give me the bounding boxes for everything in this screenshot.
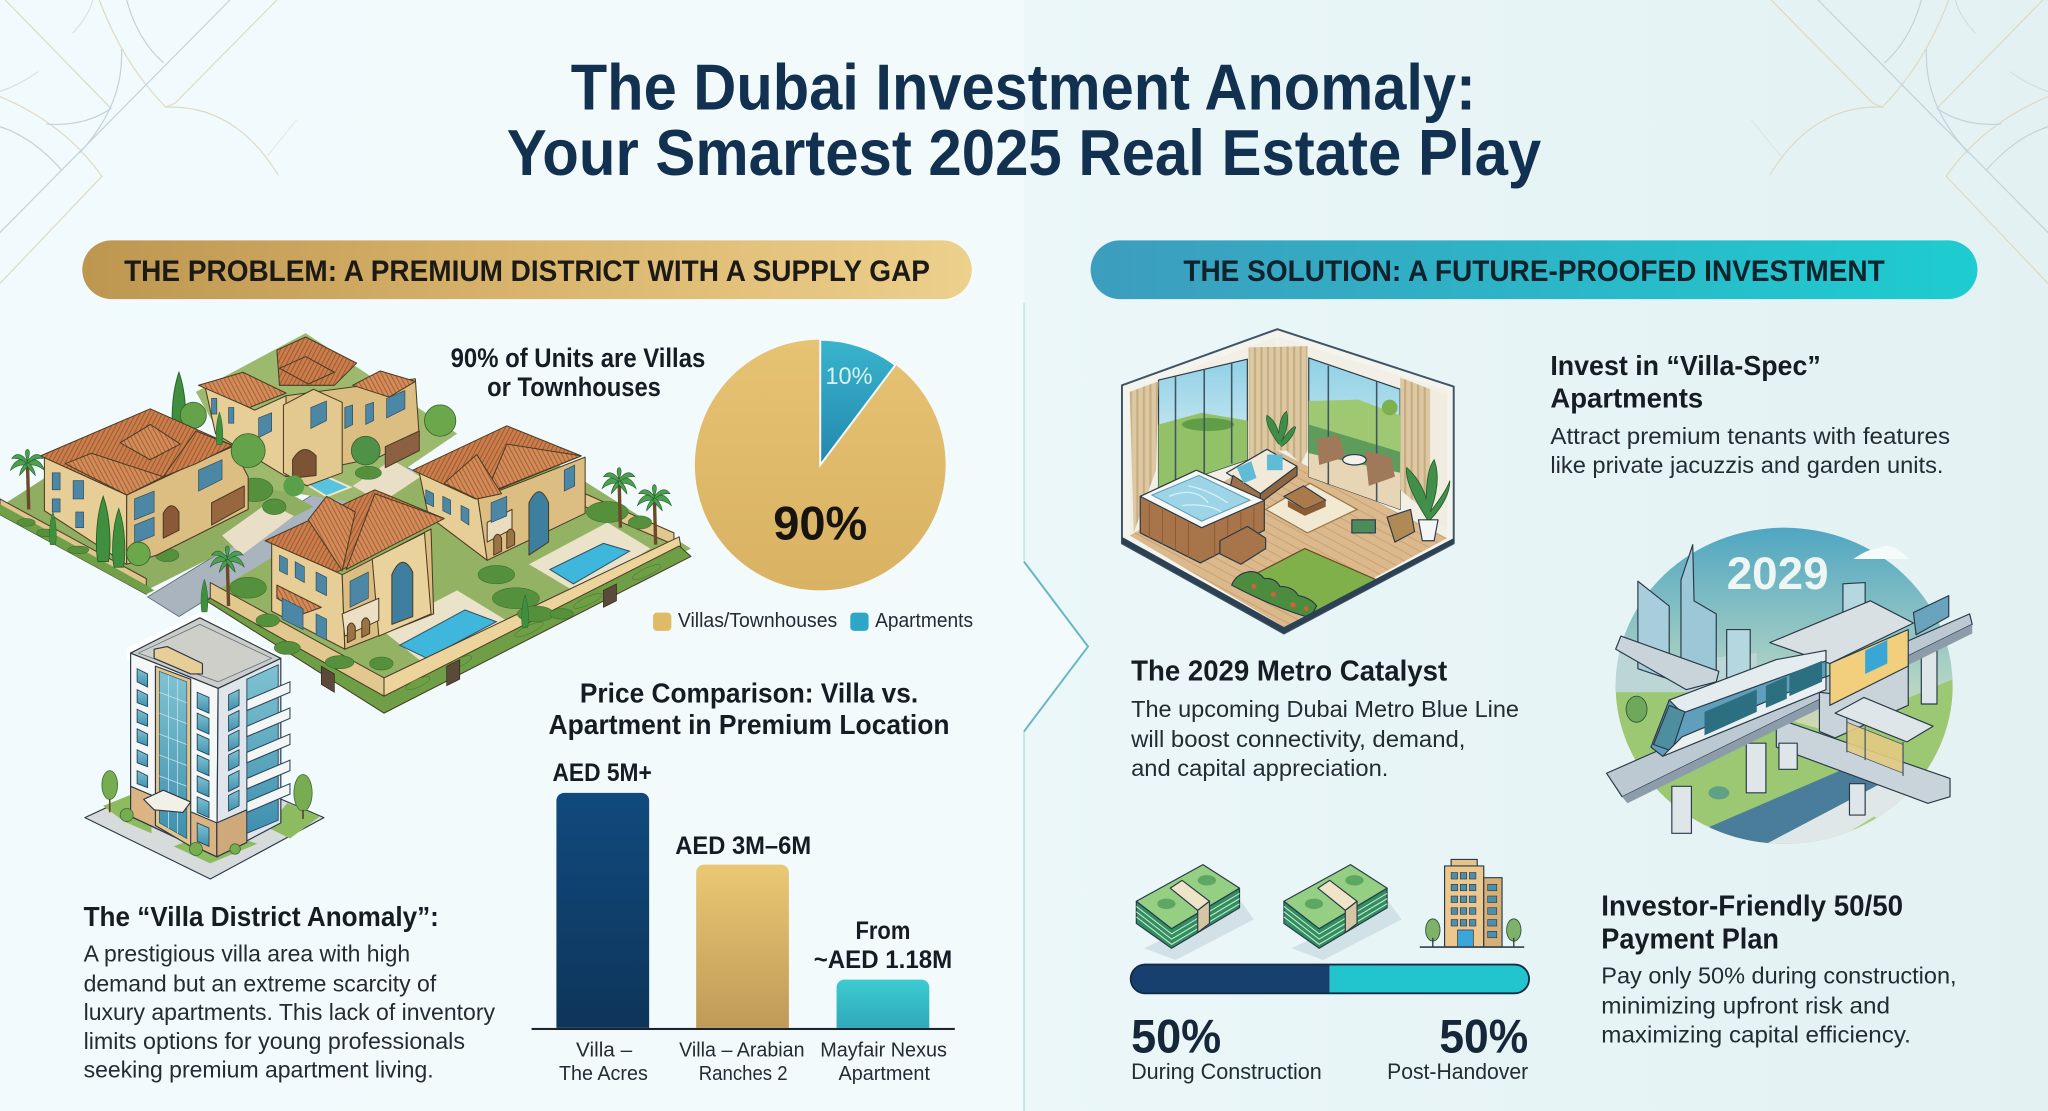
background: right panel with chevron notch <box>1024 0 2048 1111</box>
text block: invest in villa-spec apartments: Attract premium tenants with features <box>1550 423 1950 449</box>
pie legend: Apartments <box>875 610 973 632</box>
bar chart: price comparison: ~AED 1.18M <box>814 947 952 974</box>
pie legend: Villas/Townhouses <box>678 610 837 632</box>
title <box>507 51 1541 189</box>
bar chart: price comparison: From <box>856 918 910 945</box>
bar chart: price comparison: Villa – <box>576 1040 633 1062</box>
pie chart heading: 90% of Units are Villas <box>451 343 705 373</box>
bar chart heading: Price Comparison: Villa vs. <box>580 678 918 709</box>
pie chart: 90 percent villas, 10 percent apartments: 10% <box>825 363 872 390</box>
icon: cash stack 2 <box>1284 865 1401 960</box>
text block: metro catalyst: The 2029 Metro Catalyst <box>1131 655 1448 687</box>
section banner: the solution <box>1091 240 1977 299</box>
pie chart: 90 percent villas, 10 percent apartments <box>695 340 946 590</box>
chevron divider <box>1024 303 1088 1111</box>
payment split labels: 50% <box>1439 1010 1528 1063</box>
bar chart: price comparison: AED 5M+ <box>552 760 652 787</box>
text block: metro catalyst <box>1130 655 1519 781</box>
illustration: 2029 metro <box>1607 528 1972 849</box>
bar chart: price comparison: Villa – Arabian <box>679 1040 805 1062</box>
text block: villa district anomaly: demand but an extreme scarcity of <box>84 970 437 996</box>
icon: cash stack 1 <box>1136 865 1254 960</box>
text block: payment plan: minimizing upfront risk and <box>1601 993 1890 1019</box>
payment split labels: Post-Handover <box>1387 1059 1529 1084</box>
text block: invest in villa-spec apartments: Apartments <box>1550 383 1703 414</box>
text block: villa district anomaly <box>84 901 495 1083</box>
payment split labels: During Construction <box>1131 1059 1322 1084</box>
text block: payment plan <box>1601 891 1957 1047</box>
title: Your Smartest 2025 Real Estate Play <box>507 116 1541 189</box>
section banner: the solution: THE SOLUTION: A FUTURE-PROOFED INVESTMENT <box>1183 255 1885 288</box>
decorative corner lines: left <box>0 0 296 283</box>
bar chart: price comparison: The Acres <box>559 1063 648 1085</box>
villa back centre <box>199 337 419 486</box>
trees <box>10 405 671 628</box>
bar chart: price comparison: Ranches 2 <box>699 1063 788 1085</box>
text block: invest in villa-spec apartments <box>1550 350 1950 478</box>
villa front <box>265 490 444 649</box>
bar chart heading: Apartment in Premium Location <box>549 709 950 740</box>
section banner: the problem <box>82 240 972 299</box>
text block: invest in villa-spec apartments: Invest in “Villa-Spec” <box>1550 350 1821 381</box>
pie chart: 90 percent villas, 10 percent apartments: 90% <box>773 496 867 549</box>
bar chart heading <box>549 678 950 740</box>
illustration: 2029 metro: 2029 <box>1727 548 1829 599</box>
bar chart: price comparison <box>532 760 955 1085</box>
pie chart heading <box>451 343 705 402</box>
text block: metro catalyst: The upcoming Dubai Metro Blue Line <box>1131 696 1519 722</box>
decorative corner lines: right <box>1752 0 2048 283</box>
text block: villa district anomaly: limits options for young professionals <box>84 1028 465 1054</box>
text block: villa district anomaly: luxury apartments. This lack of inventory <box>84 999 495 1025</box>
text block: villa district anomaly: seeking premium apartment living. <box>84 1057 434 1083</box>
title: The Dubai Investment Anomaly: <box>571 51 1476 124</box>
text block: payment plan: Pay only 50% during construction, <box>1601 963 1957 989</box>
text block: metro catalyst: will boost connectivity, demand, <box>1130 726 1465 752</box>
bar chart: price comparison: Apartment <box>839 1063 930 1085</box>
illustration: villa community <box>0 333 691 713</box>
pie chart heading: or Townhouses <box>487 372 661 402</box>
text block: payment plan: Investor-Friendly 50/50 <box>1601 891 1903 923</box>
payment split labels <box>1131 1010 1529 1084</box>
text block: payment plan: maximizing capital efficiency. <box>1601 1021 1911 1047</box>
bar chart: price comparison: Mayfair Nexus <box>820 1040 947 1062</box>
section banner: the problem: THE PROBLEM: A PREMIUM DISTRICT WITH A SUPPLY GAP <box>124 255 930 288</box>
villa back left <box>40 372 248 564</box>
text block: villa district anomaly: A prestigious villa area with high <box>84 940 410 966</box>
illustration: villa-spec apartment interior <box>1122 329 1454 633</box>
icon: completed building <box>1420 859 1524 948</box>
bar chart: price comparison: AED 3M–6M <box>675 833 811 860</box>
pie legend <box>653 610 973 632</box>
payment progress bar <box>1131 965 1529 993</box>
ground plots and road <box>0 333 691 713</box>
payment split labels: 50% <box>1131 1010 1221 1063</box>
text block: invest in villa-spec apartments: like private jacuzzis and garden units. <box>1550 452 1944 478</box>
text block: payment plan: Payment Plan <box>1601 923 1779 955</box>
villa right <box>413 426 585 560</box>
text block: metro catalyst: and capital appreciation. <box>1131 755 1388 781</box>
text block: villa district anomaly: The “Villa District Anomaly”: <box>84 901 439 932</box>
illustration: apartment tower <box>85 613 324 879</box>
